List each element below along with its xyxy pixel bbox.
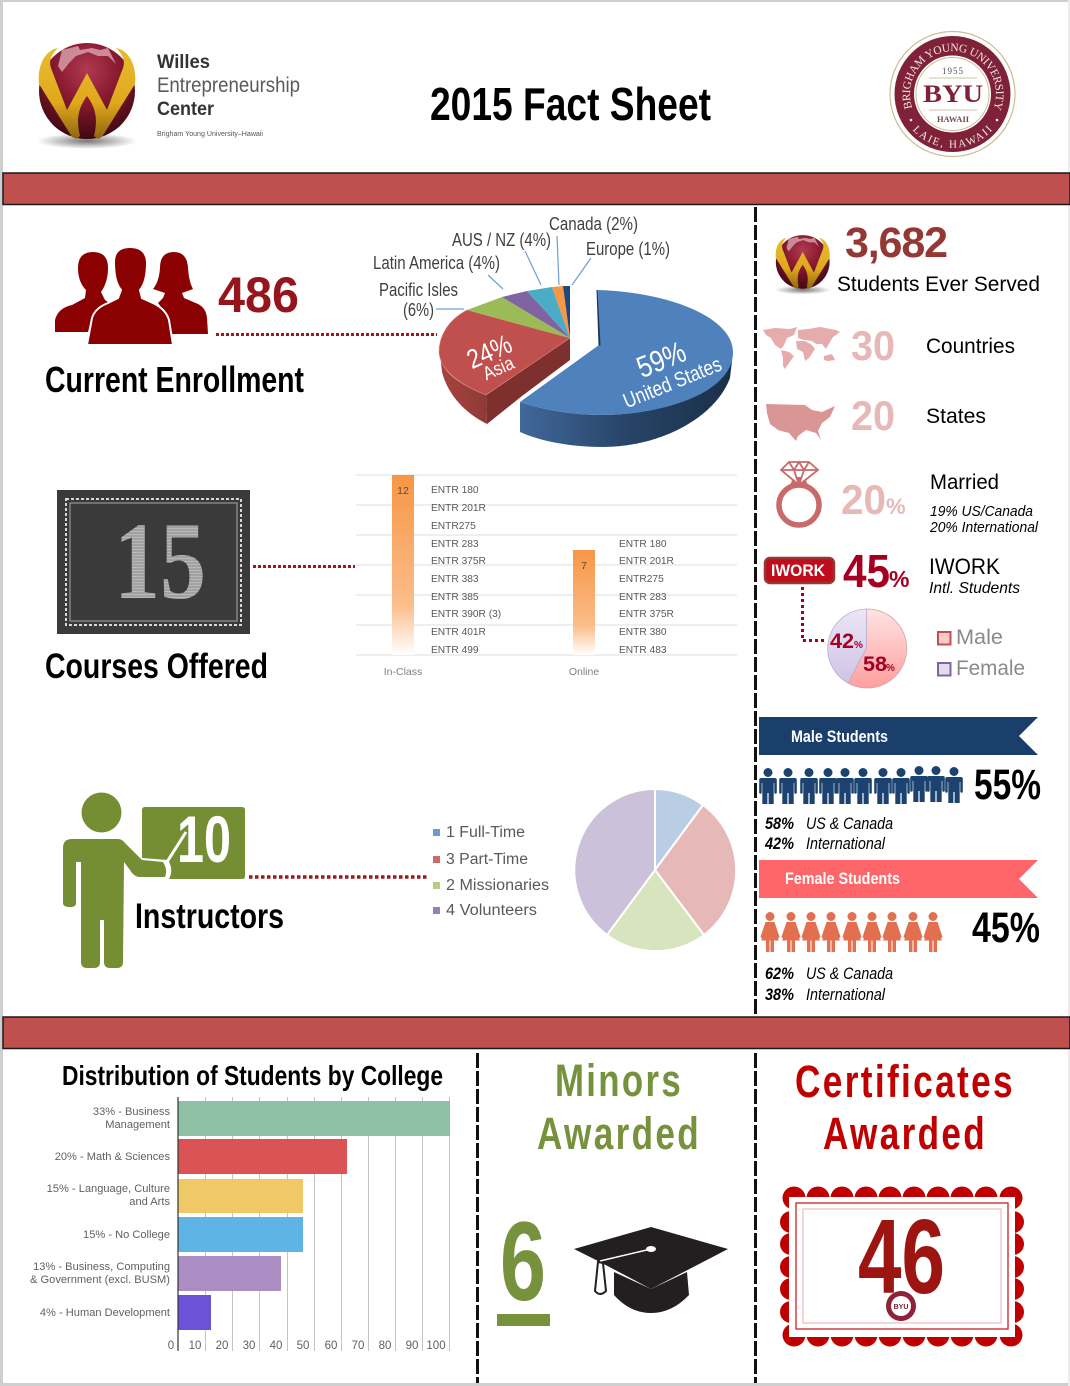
stat: female share: 45% bbox=[972, 904, 1040, 952]
stat: IWORK: IWORK bbox=[929, 554, 1000, 579]
stat: IWORK bbox=[765, 545, 1020, 640]
logo: Willes Entrepreneurship Center: Willes bbox=[157, 51, 210, 73]
certificate with 46: BYU bbox=[894, 1304, 908, 1311]
stat: states: States bbox=[926, 405, 986, 428]
heading: instructors: Instructors bbox=[135, 897, 284, 936]
3D pie chart: enrollment by region bbox=[373, 214, 733, 447]
BYU Hawaii seal: 1955 bbox=[942, 66, 964, 76]
banner: male students bbox=[759, 717, 1038, 755]
bar chart: courses in-class and online: ENTR 401R bbox=[431, 627, 486, 638]
bar chart: students by college: 15% - Language, Culture bbox=[47, 1183, 170, 1195]
connector: instructors bbox=[249, 875, 427, 879]
bar chart: courses in-class and online: ENTR 385 bbox=[431, 592, 479, 603]
3D pie chart: enrollment by region: Asia bbox=[480, 353, 518, 385]
stat: students ever served: Students Ever Served bbox=[837, 273, 1040, 296]
enrollment number: 486 bbox=[218, 267, 299, 323]
connector: enrollment bbox=[216, 333, 437, 336]
bar chart: students by college: 30 bbox=[243, 1340, 255, 1352]
legend: instructor types: 2 Missionaries bbox=[446, 877, 549, 894]
BYU Hawaii seal: BRIGHAM YOUNG UNIVERSITY bbox=[902, 44, 1004, 111]
stat: students ever served bbox=[775, 219, 1040, 296]
text: female student origin: International bbox=[806, 986, 886, 1004]
icon: chalkboard with 15: 15 bbox=[114, 500, 206, 622]
bar chart: students by college: 50 bbox=[297, 1340, 309, 1352]
bar chart: students by college: Management bbox=[105, 1119, 170, 1131]
stat: married: % bbox=[886, 494, 906, 519]
stat: IWORK: IWORK bbox=[771, 562, 825, 580]
connector: courses bbox=[253, 565, 355, 568]
icon: instructor at board bbox=[63, 792, 245, 968]
heading: courses offered: Courses Offered bbox=[45, 647, 268, 686]
bar chart: students by college: 90 bbox=[406, 1340, 418, 1352]
3D pie chart: enrollment by region: Latin America (4%) bbox=[373, 253, 500, 273]
icon: instructor at board: 10 bbox=[177, 802, 231, 876]
bar chart: students by college: 10 bbox=[189, 1340, 201, 1352]
heading: minors awarded bbox=[537, 1055, 701, 1159]
3D pie chart: enrollment by region: United States bbox=[620, 353, 725, 413]
heading: certificates awarded bbox=[795, 1056, 1015, 1159]
bar chart: courses in-class and online: ENTR 180 bbox=[619, 539, 667, 550]
bar chart: courses in-class and online: ENTR 383 bbox=[431, 574, 479, 585]
bar chart: courses in-class and online: ENTR 180 bbox=[431, 485, 479, 496]
BYU Hawaii seal: LAIE, HAWAII bbox=[912, 125, 992, 148]
pictogram: female students bbox=[760, 912, 942, 952]
heading: distribution of students by college: Distribution of Students by College bbox=[62, 1060, 443, 1091]
stat: married: 20 bbox=[841, 476, 886, 523]
legend: male and female: Male bbox=[956, 626, 1003, 649]
bar chart: students by college: 33% - Business bbox=[93, 1106, 170, 1118]
text: female student origin: US & Canada bbox=[806, 965, 893, 983]
pie chart: IWORK gender: % bbox=[886, 663, 895, 674]
stat: IWORK: Intl. Students bbox=[929, 580, 1020, 597]
bar chart: courses in-class and online: ENTR 201R bbox=[619, 556, 674, 567]
top red band bbox=[3, 173, 1070, 204]
dashed dividers: lower section bbox=[478, 1053, 756, 1383]
bar chart: students by college: 0 bbox=[168, 1340, 174, 1352]
text: female student origin bbox=[765, 965, 893, 1004]
pie chart: IWORK gender bbox=[828, 609, 907, 688]
legend: male and female bbox=[938, 626, 1025, 680]
bar chart: students by college: 20 bbox=[216, 1340, 228, 1352]
pie chart: IWORK gender: 58 bbox=[863, 653, 887, 676]
stat: countries bbox=[763, 322, 1015, 369]
heading: minors awarded: Awarded bbox=[537, 1108, 701, 1159]
bar chart: courses in-class and online: ENTR 380 bbox=[619, 627, 667, 638]
bar chart: courses in-class and online: ENTR 499 bbox=[431, 645, 479, 656]
3D pie chart: enrollment by region: Europe (1%) bbox=[586, 239, 670, 259]
bar chart: students by college: 70 bbox=[352, 1340, 364, 1352]
lower red band bbox=[3, 1017, 1070, 1048]
legend: male and female: Female bbox=[956, 657, 1025, 680]
icon: current enrollment people bbox=[55, 247, 208, 345]
bar chart: students by college: 100 bbox=[426, 1340, 446, 1352]
bar chart: courses in-class and online: ENTR 375R bbox=[431, 556, 486, 567]
stat: countries: Countries bbox=[926, 335, 1015, 358]
stat: married: Married bbox=[930, 471, 999, 494]
certificate with 46: 46 bbox=[858, 1198, 945, 1316]
bar chart: courses in-class and online: In-Class bbox=[384, 666, 422, 678]
bar chart: courses in-class and online: ENTR 390R (3) bbox=[431, 609, 501, 620]
legend: instructor types: 3 Part-Time bbox=[446, 851, 528, 868]
bar chart: courses in-class and online: 7 bbox=[581, 560, 587, 572]
text: male student origin: US & Canada bbox=[806, 815, 893, 833]
logo: Willes Entrepreneurship Center: Brigham Young University–Hawaii bbox=[157, 131, 263, 138]
legend: instructor types: 1 Full-Time bbox=[446, 824, 525, 841]
text: female student origin: 62% bbox=[765, 965, 794, 983]
heading: minors awarded: Minors bbox=[555, 1055, 683, 1106]
icon: chalkboard with 15 bbox=[57, 490, 250, 634]
bar chart: courses in-class and online: ENTR275 bbox=[619, 574, 664, 585]
3D pie chart: enrollment by region: Canada (2%) bbox=[549, 214, 638, 234]
BYU Hawaii seal bbox=[889, 30, 1016, 158]
bar chart: courses in-class and online bbox=[356, 475, 737, 678]
bar chart: courses in-class and online: ENTR 283 bbox=[431, 539, 479, 550]
text: male student origin bbox=[764, 815, 893, 853]
bar chart: students by college: 13% - Business, Computing bbox=[33, 1261, 170, 1273]
heading: certificates awarded: Certificates bbox=[795, 1056, 1015, 1107]
text: male student origin: 42% bbox=[764, 835, 794, 853]
bar chart: courses in-class and online: ENTR 283 bbox=[619, 592, 667, 603]
bar chart: students by college: 4% - Human Development bbox=[40, 1307, 170, 1319]
bar chart: students by college: 60 bbox=[325, 1340, 337, 1352]
stat: male share: 55% bbox=[974, 761, 1041, 809]
stat: married: 19% US/Canada bbox=[930, 504, 1033, 520]
3D pie chart: enrollment by region: 24% bbox=[462, 329, 516, 375]
bar chart: courses in-class and online: Online bbox=[569, 666, 599, 678]
stat: 6 minors: 6 bbox=[500, 1199, 546, 1324]
banner: female students: Female Students bbox=[785, 869, 900, 888]
pie chart: instructors bbox=[574, 789, 736, 951]
text: female student origin: 38% bbox=[765, 986, 794, 1004]
pie chart: IWORK gender: % bbox=[854, 640, 863, 651]
3D pie chart: enrollment by region: Pacific Isles bbox=[379, 280, 458, 300]
bar chart: courses in-class and online: ENTR 201R bbox=[431, 503, 486, 514]
bar chart: courses in-class and online: ENTR 375R bbox=[619, 609, 674, 620]
BYU Hawaii seal: BYU bbox=[923, 81, 983, 108]
heading: current enrollment: Current Enrollment bbox=[45, 359, 304, 400]
bar chart: students by college: 40 bbox=[270, 1340, 282, 1352]
pictogram: male students bbox=[759, 766, 963, 804]
stat: IWORK: 45 bbox=[843, 545, 890, 597]
bar chart: students by college: and Arts bbox=[129, 1196, 170, 1208]
logo: Willes Entrepreneurship Center: Entrepreneurship bbox=[157, 74, 300, 97]
text: male student origin: 58% bbox=[765, 815, 794, 833]
bar chart: students by college: 15% - No College bbox=[83, 1229, 170, 1241]
BYU Hawaii seal: HAWAII bbox=[937, 114, 970, 124]
heading: certificates awarded: Awarded bbox=[823, 1108, 987, 1159]
stat: states bbox=[766, 392, 986, 441]
legend: instructor types: 4 Volunteers bbox=[446, 902, 537, 919]
banner: female students bbox=[759, 860, 1038, 898]
bar chart: students by college bbox=[30, 1097, 450, 1352]
3D pie chart: enrollment by region: 59% bbox=[632, 336, 691, 385]
dashed divider: right column bbox=[754, 207, 757, 1015]
bar chart: students by college: 20% - Math & Sciences bbox=[55, 1151, 170, 1163]
stat: states: 20 bbox=[851, 392, 895, 439]
banner: male students: Male Students bbox=[791, 727, 888, 746]
icon: graduation cap bbox=[574, 1227, 728, 1313]
bar chart: courses in-class and online: 12 bbox=[397, 485, 409, 497]
logo: Willes Entrepreneurship Center bbox=[37, 43, 300, 149]
stat: IWORK: % bbox=[889, 566, 909, 592]
bar chart: courses in-class and online: ENTR275 bbox=[431, 521, 476, 532]
pie chart: IWORK gender: 42 bbox=[830, 630, 854, 653]
certificate with 46 bbox=[780, 1186, 1024, 1346]
bar chart: students by college: 80 bbox=[379, 1340, 391, 1352]
stat: married bbox=[779, 462, 1039, 536]
title: 2015 Fact Sheet bbox=[430, 78, 711, 130]
3D pie chart: enrollment by region: AUS / NZ (4%) bbox=[452, 230, 551, 250]
text: male student origin: International bbox=[806, 835, 886, 853]
stat: students ever served: 3,682 bbox=[845, 219, 948, 267]
bar chart: students by college: & Government (excl. BUSM) bbox=[30, 1274, 170, 1286]
legend: instructor types bbox=[433, 824, 549, 919]
stat: countries: 30 bbox=[851, 322, 895, 369]
stat: married: 20% International bbox=[929, 520, 1039, 536]
logo: Willes Entrepreneurship Center: Center bbox=[157, 98, 214, 120]
bar chart: courses in-class and online: ENTR 483 bbox=[619, 645, 667, 656]
3D pie chart: enrollment by region: (6%) bbox=[403, 300, 434, 320]
